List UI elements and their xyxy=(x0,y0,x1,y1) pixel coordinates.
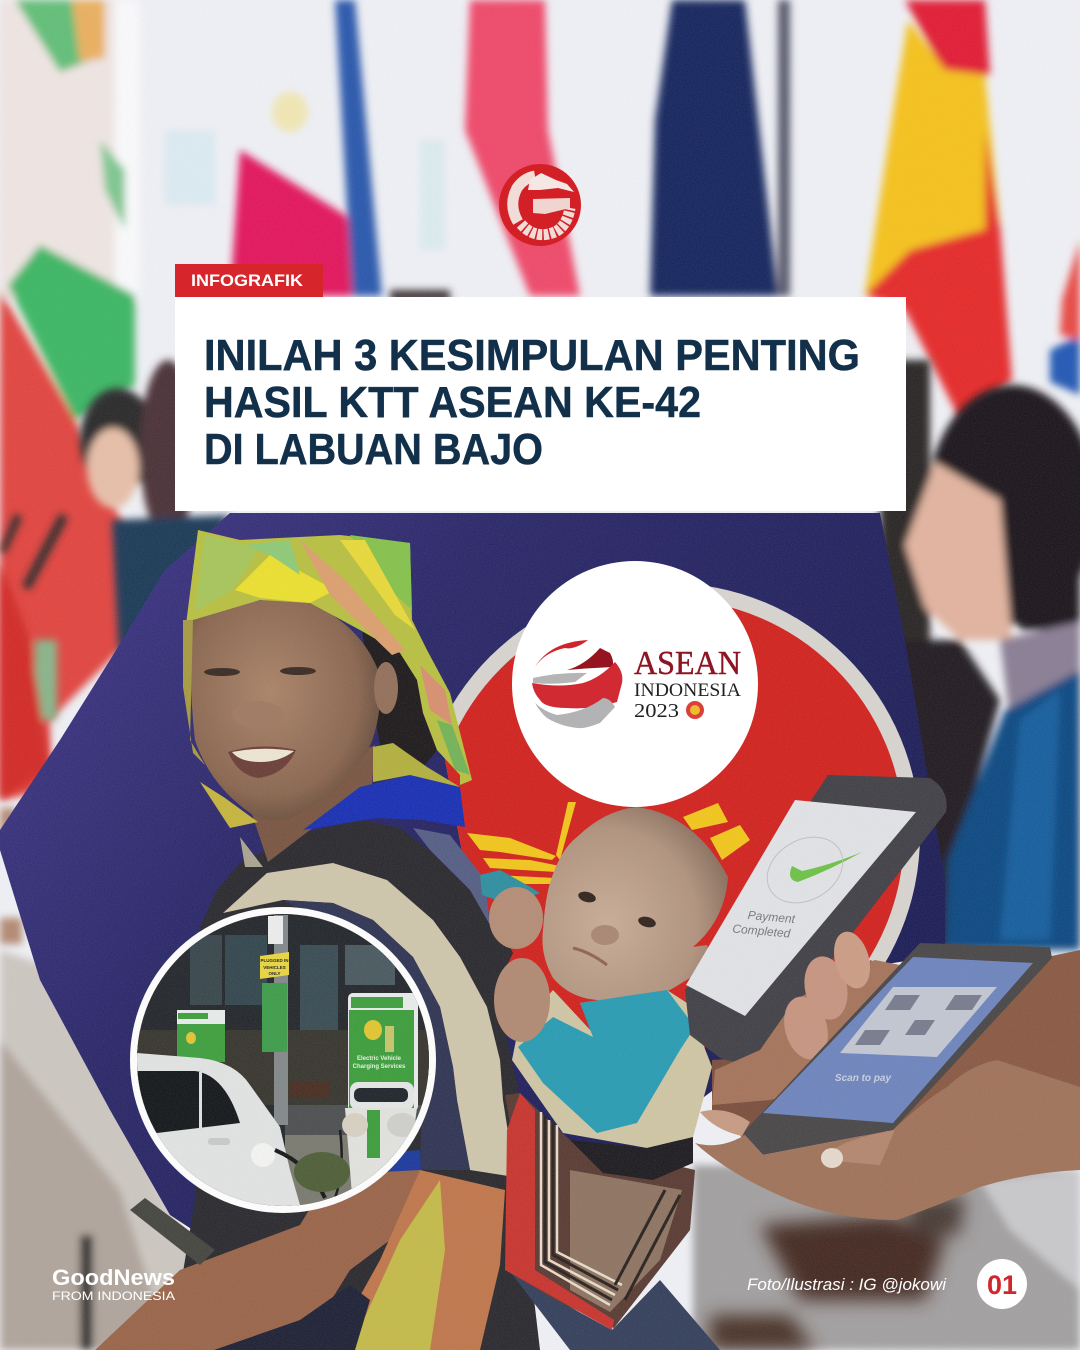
baby eyes, nose, mouth xyxy=(577,890,597,904)
logo: GNFI garuda badge xyxy=(499,164,581,246)
arm xyxy=(95,1170,420,1350)
face xyxy=(362,630,437,765)
baby sleeve behind hand xyxy=(480,870,540,905)
back charger xyxy=(177,1010,225,1062)
yellow sign: PLUGGED IN xyxy=(260,958,289,963)
globe mark xyxy=(532,640,622,728)
baby head xyxy=(542,807,728,1001)
left delegates xyxy=(80,388,156,492)
page number: 01 xyxy=(987,1270,1017,1300)
phone caption: Payment xyxy=(747,908,796,926)
dark hood and body xyxy=(100,820,540,1350)
phone: payment completed xyxy=(685,775,947,1062)
front charger xyxy=(342,993,418,1195)
car xyxy=(137,1053,300,1206)
woman with baby xyxy=(95,530,728,1350)
baby hands xyxy=(489,887,543,949)
phone: payment completed: Completed xyxy=(732,922,791,941)
ASEAN Indonesia 2023 logo circle xyxy=(512,561,758,807)
baby shirt sleeve xyxy=(518,990,695,1133)
yellow sign: ONLY xyxy=(268,971,281,976)
GoodNews from Indonesia logo xyxy=(52,1265,175,1303)
neck xyxy=(250,745,375,862)
bottom right table xyxy=(693,1165,1080,1350)
label: INFOGRAFIK xyxy=(175,264,323,297)
hands and phones xyxy=(685,775,1080,1220)
headscarf xyxy=(183,530,472,828)
emblem xyxy=(444,586,920,1048)
title text: DI LABUAN BAJO xyxy=(204,425,543,474)
cream hood lining xyxy=(223,863,515,1177)
title panel xyxy=(175,297,906,511)
title text xyxy=(204,331,860,474)
yellow sign: VEHICLES xyxy=(263,965,286,970)
EV charging photo in circle xyxy=(125,905,440,1225)
far arm behind phones xyxy=(860,950,1080,1135)
title text: INILAH 3 KESIMPULAN PENTING xyxy=(204,331,860,380)
palm behind phones xyxy=(712,1050,900,1140)
phone caption: Scan to pay xyxy=(835,1073,891,1084)
blue collar xyxy=(303,775,465,830)
ASEAN flag cloth xyxy=(0,513,945,1300)
textile under lining xyxy=(283,900,470,1170)
cream sling xyxy=(512,990,712,1148)
textile right of hood xyxy=(413,828,490,925)
skirt xyxy=(330,1170,505,1350)
title text: HASIL KTT ASEAN KE-42 xyxy=(204,378,701,427)
palm bottom xyxy=(695,1060,1080,1220)
grey collar xyxy=(240,837,263,867)
holding hand xyxy=(712,960,900,1105)
photo credit: Foto/Ilustrasi : IG @jokowi xyxy=(747,1275,947,1294)
right delegate xyxy=(880,360,930,640)
black band xyxy=(570,1137,693,1180)
sign pole xyxy=(274,915,288,1125)
GoodNews from Indonesia logo: FROM INDONESIA xyxy=(52,1289,175,1303)
label: INFOGRAFIK: INFOGRAFIK xyxy=(191,271,304,290)
ASEAN Indonesia 2023 logo circle: INDONESIA xyxy=(634,680,741,701)
bottom left pale cloth xyxy=(0,950,250,1350)
GoodNews from Indonesia logo: GoodNews xyxy=(52,1265,175,1290)
ASEAN Indonesia 2023 logo circle: 2023 xyxy=(634,700,679,722)
yellow sign xyxy=(260,952,289,979)
phone: QR xyxy=(743,943,1052,1155)
ASEAN Indonesia 2023 logo circle: ASEAN xyxy=(634,645,741,682)
patterned bag xyxy=(505,1093,695,1328)
page number xyxy=(977,1259,1027,1309)
front charger: Charging Services xyxy=(353,1064,406,1070)
front charger: Electric Vehicle xyxy=(357,1056,402,1062)
eyes, nose, mouth xyxy=(204,668,240,676)
